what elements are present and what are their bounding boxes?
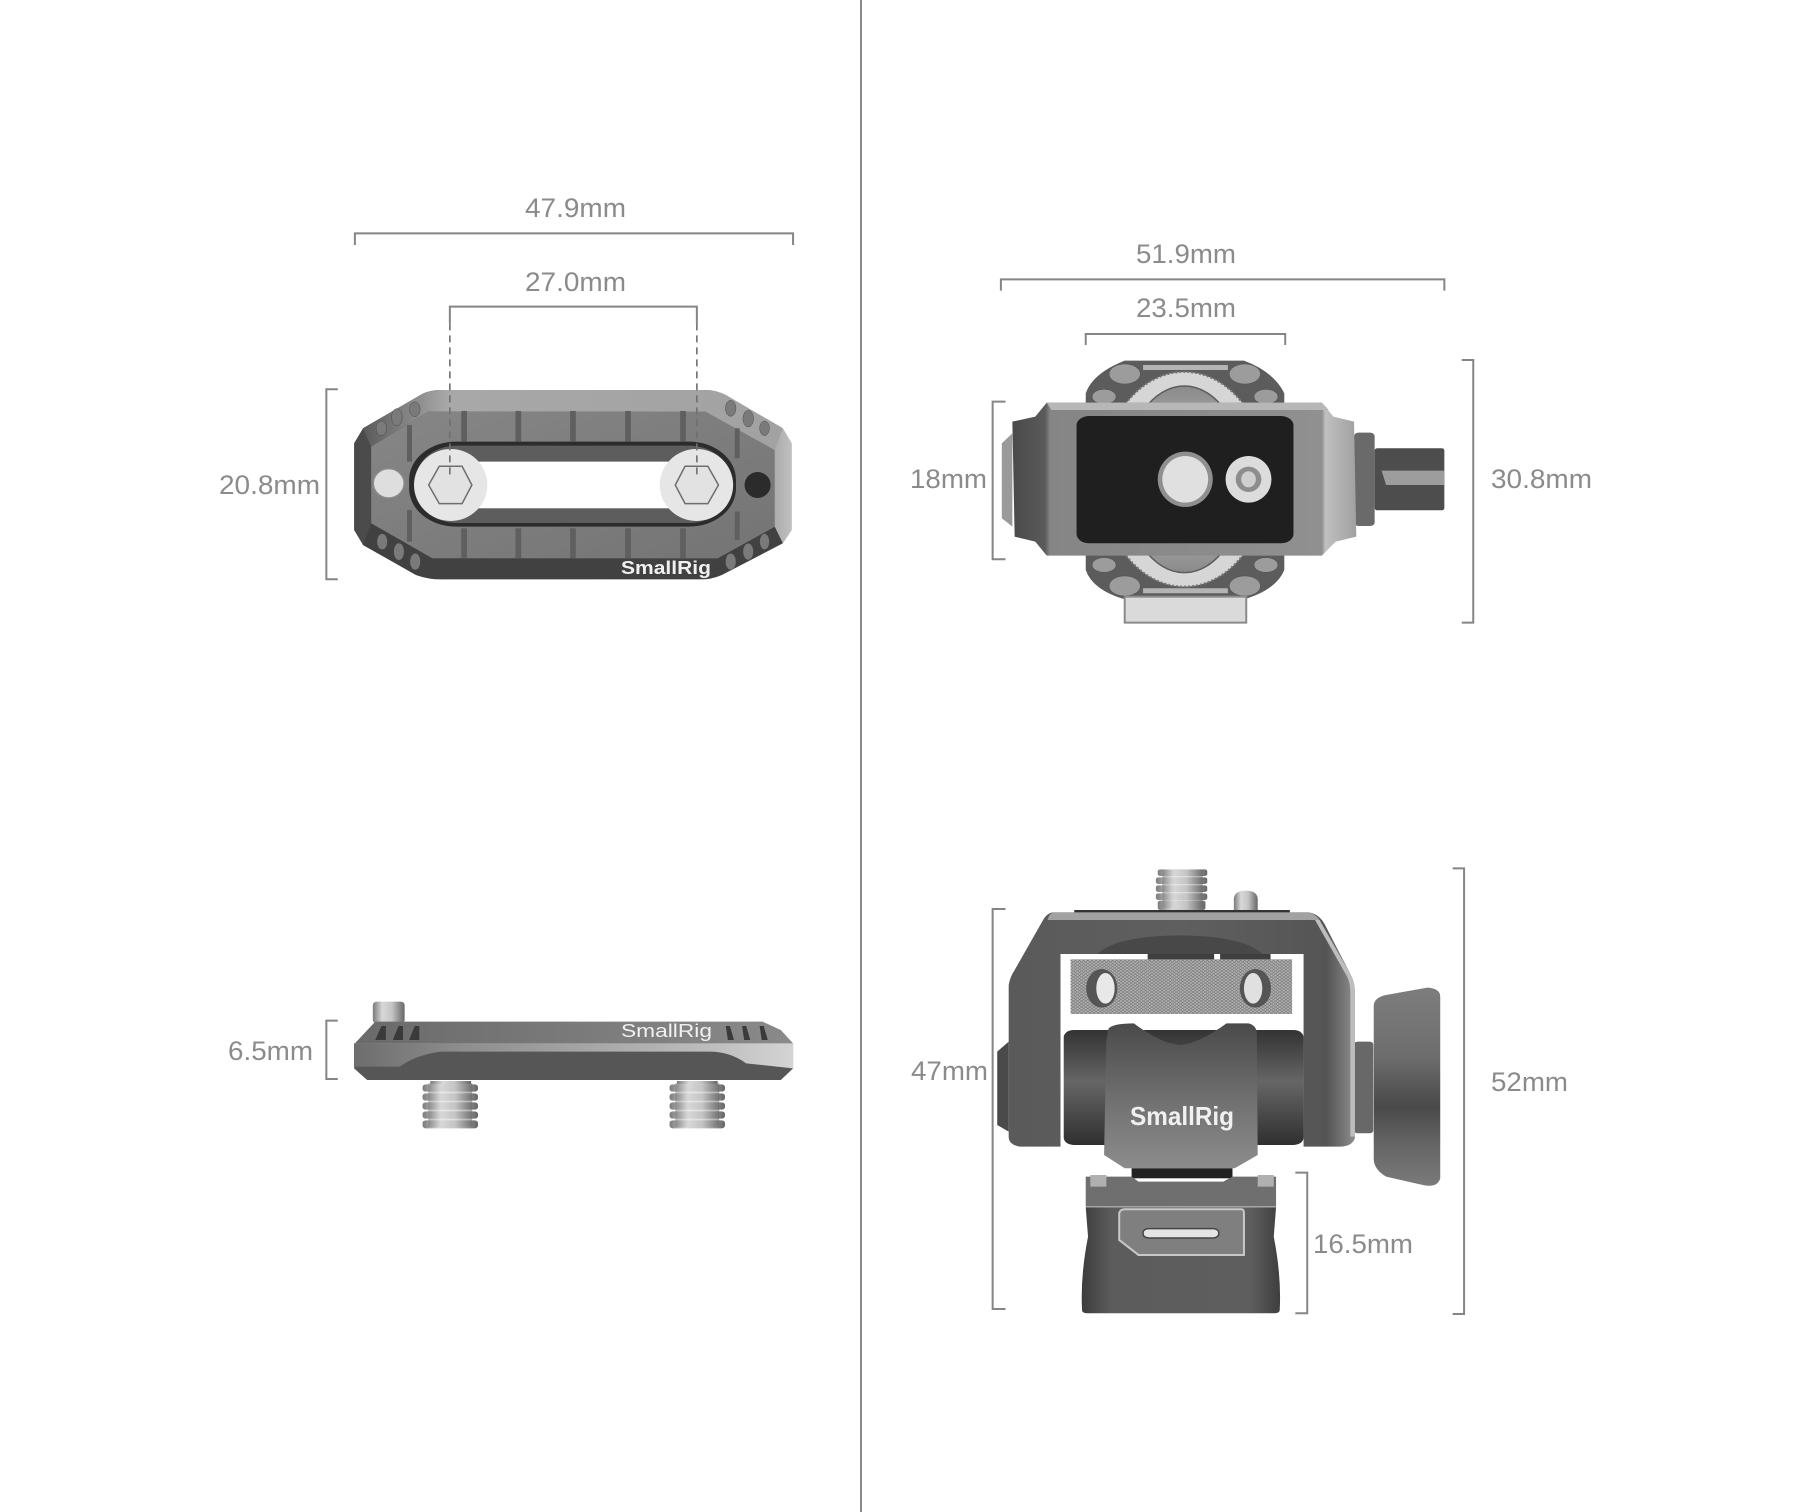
top screw — [1156, 869, 1207, 910]
central disc — [1102, 372, 1267, 587]
rear housing top — [1086, 361, 1284, 407]
logo on plate: SmallRig — [621, 558, 711, 578]
ring slot left — [1086, 969, 1117, 1008]
plate face — [371, 412, 775, 558]
panel: plate side view — [228, 1002, 793, 1128]
dimension bracket 27.0mm — [450, 307, 697, 323]
plate side-view drawing — [326, 1002, 793, 1128]
slot opening — [477, 462, 669, 508]
mount top-view drawing — [993, 279, 1473, 623]
side face — [354, 1043, 793, 1080]
panel: mount front view — [911, 868, 1568, 1314]
left bolt — [414, 449, 487, 521]
dimension bracket 52mm — [1453, 868, 1464, 1314]
dimension bracket 6.5mm — [326, 1021, 338, 1079]
dashed guide lines — [450, 323, 697, 477]
knob — [1375, 448, 1444, 510]
release badge — [1119, 1209, 1244, 1255]
connector corner pins — [1090, 1175, 1274, 1187]
ring top blocks — [1148, 954, 1271, 959]
label 23.5mm: 23.5mm — [1136, 293, 1236, 323]
label 20.8mm: 20.8mm — [219, 470, 320, 500]
locating pin — [373, 469, 404, 498]
logo on side: SmallRig — [621, 1021, 712, 1041]
dimension bracket 47.9mm — [355, 233, 793, 245]
left cap — [1002, 433, 1012, 527]
center ball body — [1104, 1023, 1258, 1168]
right washer — [1354, 1042, 1373, 1133]
badge slot — [1143, 1229, 1219, 1238]
right bolt — [660, 449, 733, 521]
right collar — [1354, 433, 1375, 526]
bracket top highlight — [1048, 912, 1320, 920]
dimension bracket 23.5mm — [1086, 334, 1285, 345]
panel: plate top view — [219, 193, 793, 579]
dimension bracket 30.8mm — [1462, 360, 1473, 623]
ring slot right — [1240, 969, 1271, 1008]
slot — [409, 442, 736, 527]
knurled ring — [1071, 959, 1292, 1014]
left cap — [997, 1042, 1009, 1132]
main body — [1012, 403, 1356, 556]
knob highlight — [1382, 471, 1444, 485]
hole — [745, 472, 771, 498]
pin — [373, 1002, 405, 1023]
bracket dome shade — [1097, 935, 1262, 954]
label 47.9mm: 47.9mm — [525, 193, 626, 223]
knurl slots left — [375, 1026, 419, 1040]
plate outer body — [354, 390, 792, 579]
dimension bracket 47mm — [993, 909, 1005, 1309]
body top highlight — [1047, 403, 1329, 410]
top face — [355, 1022, 793, 1043]
top pin — [1234, 891, 1258, 910]
left screw thread — [423, 1081, 478, 1128]
ribs — [407, 411, 740, 558]
neck — [1132, 1168, 1232, 1178]
small pin — [1226, 456, 1271, 503]
logo on ball body: SmallRig — [1130, 1101, 1234, 1131]
dimension bracket 20.8mm — [326, 389, 338, 579]
label 47mm: 47mm — [911, 1056, 988, 1086]
mount front-view drawing — [993, 868, 1464, 1314]
center divider line — [860, 0, 862, 1512]
label 16.5mm: 16.5mm — [1313, 1229, 1413, 1259]
label 51.9mm: 51.9mm — [1136, 239, 1236, 269]
top housing bar — [1143, 365, 1228, 593]
label 30.8mm: 30.8mm — [1491, 464, 1592, 494]
horizontal barrel — [1064, 1030, 1304, 1145]
slot inner wall — [416, 446, 730, 523]
large screw — [1158, 452, 1213, 507]
rear housing bottom — [1086, 552, 1284, 599]
highlight band — [354, 1043, 793, 1068]
dimension bracket 51.9mm — [1001, 279, 1444, 291]
bracket right highlight — [1315, 920, 1355, 1137]
panel: mount top view — [910, 239, 1592, 623]
connector lower body — [1082, 1207, 1280, 1313]
knurl slots right — [726, 1026, 768, 1040]
top bevel — [363, 390, 783, 450]
bottom bevel — [363, 523, 783, 579]
corner screws — [1092, 364, 1278, 596]
U bracket — [1009, 912, 1355, 1147]
central dome — [1124, 386, 1245, 573]
label 27.0mm: 27.0mm — [525, 267, 626, 297]
label 52mm: 52mm — [1491, 1067, 1568, 1097]
knob wing — [1374, 988, 1440, 1186]
black pad — [1077, 416, 1293, 543]
label 6.5mm: 6.5mm — [228, 1036, 313, 1066]
label 18mm: 18mm — [910, 464, 987, 494]
corner knurls — [376, 400, 769, 570]
right screw thread — [670, 1081, 725, 1128]
bottom tab — [1125, 597, 1246, 623]
dimension bracket 16.5mm — [1295, 1173, 1307, 1313]
dimension bracket 18mm — [993, 402, 1005, 559]
top strip — [1074, 910, 1290, 913]
connector top block — [1086, 1177, 1276, 1207]
plate top-view drawing — [326, 233, 793, 579]
